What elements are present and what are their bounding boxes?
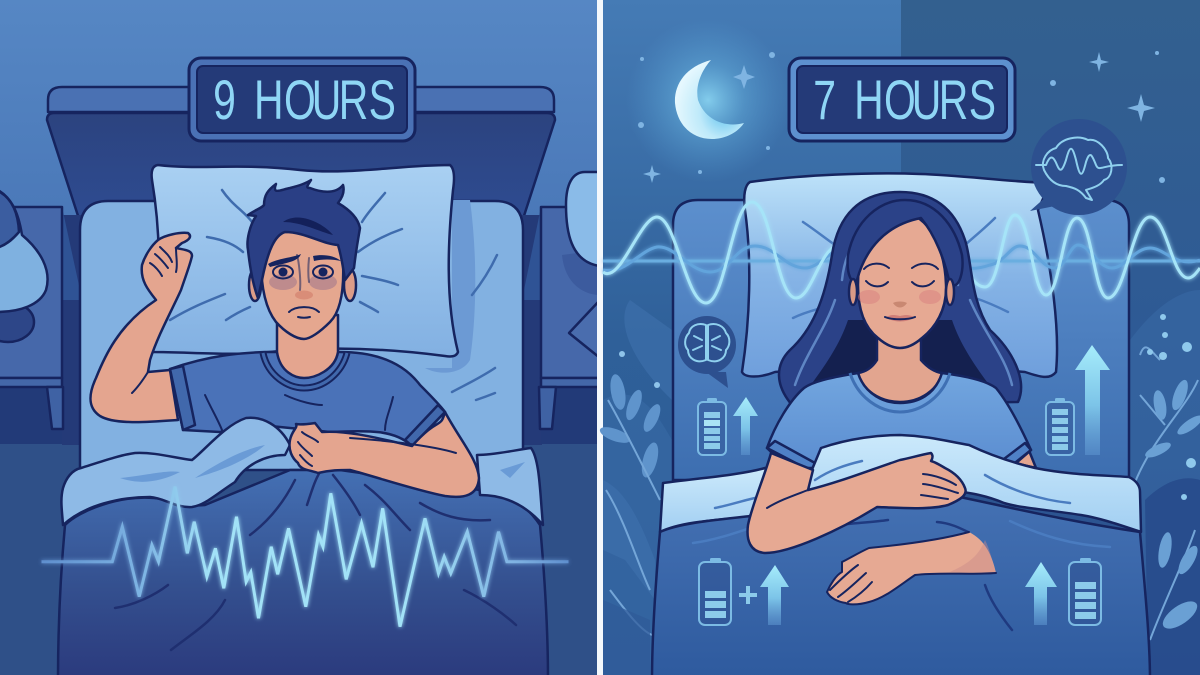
neck xyxy=(858,320,942,402)
hair xyxy=(247,180,360,298)
small brain bubble xyxy=(678,316,736,388)
pillow xyxy=(742,173,1057,377)
right nightstand xyxy=(522,172,603,445)
far arm behind shirt xyxy=(1010,448,1036,468)
pillow xyxy=(152,165,497,400)
battery and arrow: top right xyxy=(1046,345,1110,455)
digital clock: 7 hours xyxy=(789,58,1015,141)
moon xyxy=(626,18,790,182)
left nightstand xyxy=(0,207,82,445)
foliage right xyxy=(1130,290,1200,675)
foliage left xyxy=(598,300,672,675)
bed headboard block xyxy=(673,200,1129,480)
battery and arrow: top left xyxy=(698,397,758,455)
battery, plus and arrow: bottom left xyxy=(699,558,789,625)
digital clock: 7 hours: 7 HOURS xyxy=(813,70,996,132)
lamp on left nightstand xyxy=(0,189,48,342)
upper arm and hand xyxy=(748,453,966,553)
neck xyxy=(277,315,338,378)
blanket and sheet xyxy=(652,435,1150,675)
headboard xyxy=(47,87,555,222)
digital clock: 9 hours: 9 HOURS xyxy=(213,70,396,132)
duvet xyxy=(58,470,548,675)
chart: erratic brain wave line xyxy=(42,487,568,627)
face features xyxy=(858,264,941,322)
person: awake man xyxy=(90,180,445,446)
head xyxy=(858,212,946,348)
panel: healthy sleep, 7 hours xyxy=(598,0,1200,675)
shirt xyxy=(767,373,1031,471)
person: sleeping woman xyxy=(652,192,1150,675)
long hair back xyxy=(779,192,1021,405)
face features: eyes, brows, mouth xyxy=(268,254,341,318)
arm holding blanket xyxy=(289,412,479,497)
front hair xyxy=(848,200,962,286)
lower arm and hand xyxy=(827,532,996,604)
brain thought bubble xyxy=(1030,119,1127,215)
digital clock: 9 hours xyxy=(189,58,415,141)
collar xyxy=(263,353,347,388)
arm raised with hand xyxy=(90,233,192,422)
stars xyxy=(638,51,1165,183)
sound waves: slow-wave sleep xyxy=(603,202,1200,303)
ears xyxy=(249,269,356,301)
shirt xyxy=(170,352,445,446)
head xyxy=(261,226,343,339)
ears xyxy=(849,279,954,305)
arrow and battery: bottom right xyxy=(1025,558,1101,625)
blanket fold xyxy=(61,418,543,525)
divider xyxy=(597,0,603,675)
mattress xyxy=(80,201,523,470)
panel: too much sleep, 9 hours xyxy=(0,0,603,675)
